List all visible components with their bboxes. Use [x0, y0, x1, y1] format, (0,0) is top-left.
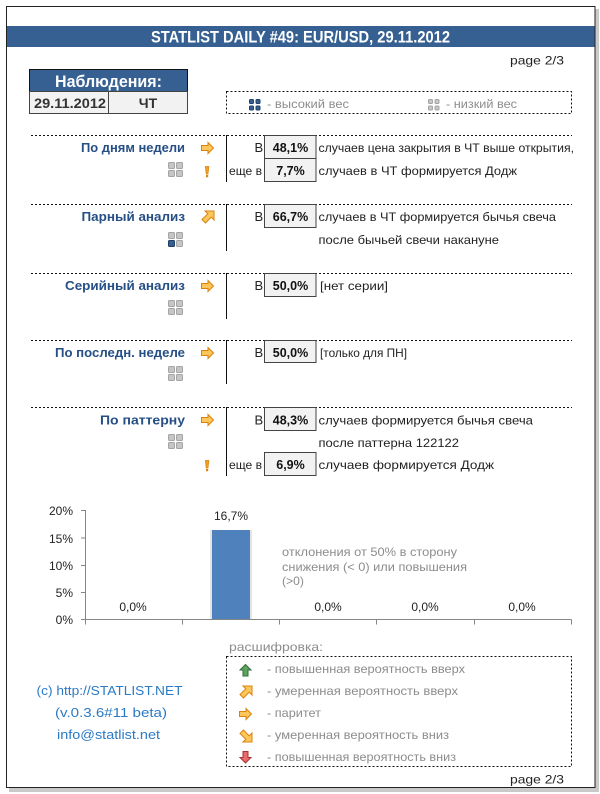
credits: (c) http://STATLIST.NET [36, 683, 183, 698]
panel: pair analysis: после бычьей свечи накануне [318, 233, 499, 247]
panel: by pattern: 6,9% [276, 458, 305, 472]
panel: by weekday: еще в [229, 164, 262, 178]
panel: pair analysis: Парный анализ [82, 210, 185, 224]
panel: by pattern [31, 407, 572, 476]
panel: by pattern: после паттерна 122122 [318, 436, 459, 450]
title: STATLIST DAILY #49: EUR/USD, 29.11.2012 [151, 28, 450, 46]
credits [36, 683, 183, 742]
panel: by weekday: случаев в ЧТ формируется Додж [318, 164, 517, 178]
bar chart: 0,0% [314, 600, 342, 614]
panel: last week: По последн. неделе [55, 346, 185, 360]
legend: weight: - низкий вес [446, 97, 517, 111]
credits: (v.0.3.6#11 beta) [55, 705, 167, 720]
panel: series analysis [31, 273, 572, 319]
bar chart: 16,7% [214, 509, 248, 523]
panel: observations [30, 70, 188, 114]
legend: arrows: - повышенная вероятность вниз [267, 750, 457, 764]
panel: series analysis: В [254, 278, 263, 293]
chart note: отклонения от 50% в сторону [282, 545, 457, 559]
panel: observations: Наблюдения: [55, 73, 162, 91]
panel: by pattern: По паттерну [100, 414, 185, 428]
credits: info@statlist.net [57, 727, 160, 742]
page number bottom: page 2/3 [510, 772, 564, 786]
chart note: снижения (< 0) или повышения [282, 560, 467, 574]
bar chart: 0,0% [119, 600, 147, 614]
panel: series analysis: [нет серии] [320, 279, 388, 293]
legend: arrows: - умеренная вероятность вниз [267, 728, 450, 742]
panel: by weekday: По дням недели [81, 141, 185, 155]
panel: pair analysis: В [254, 209, 263, 224]
panel: by weekday: 48,1% [273, 141, 308, 155]
panel: by weekday: случаев цена закрытия в ЧТ выше открытия, [318, 141, 574, 155]
bar chart: 0,0% [411, 600, 439, 614]
legend: arrows [226, 656, 572, 766]
panel: last week: [только для ПН] [320, 346, 407, 360]
panel: pair analysis: 66,7% [273, 210, 308, 224]
panel: series analysis: Серийный анализ [65, 279, 185, 293]
chart note: (>0) [282, 574, 304, 588]
panel: observations: 29.11.2012 [34, 95, 106, 111]
legend: weight [226, 92, 572, 114]
panel: last week [31, 340, 572, 384]
title [7, 26, 594, 47]
bar chart: 5% [56, 586, 73, 600]
bar chart: 10% [49, 559, 73, 573]
panel: last week: В [254, 345, 263, 360]
legend: weight: - высокий вес [267, 97, 349, 111]
page number top: page 2/3 [510, 54, 564, 68]
panel: observations: ЧТ [139, 95, 158, 111]
legend: arrows: - умеренная вероятность вверх [267, 684, 458, 698]
panel: pair analysis: случаев в ЧТ формируется бычья свеча [318, 210, 556, 224]
panel: by pattern: еще в [229, 458, 262, 472]
legend: arrows: - паритет [267, 706, 322, 720]
panel: series analysis: 50,0% [273, 279, 308, 293]
panel: by pattern: 48,3% [273, 414, 308, 428]
panel: last week: 50,0% [273, 346, 308, 360]
bar chart: 0,0% [508, 600, 536, 614]
panel: by pattern: случаев формируется Додж [318, 458, 494, 472]
panel: by weekday: 7,7% [276, 164, 305, 178]
panel: by pattern: случаев формируется бычья свеча [318, 414, 533, 428]
chart note [282, 545, 467, 588]
panel: pair analysis [31, 204, 572, 251]
bar chart: 0% [56, 613, 73, 627]
panel: by weekday [31, 135, 574, 182]
legend heading: расшифровка: [229, 640, 323, 654]
legend: arrows: - повышенная вероятность вверх [267, 662, 465, 676]
bar chart: 20% [49, 504, 73, 518]
panel: by weekday: В [254, 140, 263, 155]
panel: by pattern: В [254, 412, 263, 428]
bar chart [49, 504, 572, 627]
bar chart: 15% [49, 532, 73, 546]
